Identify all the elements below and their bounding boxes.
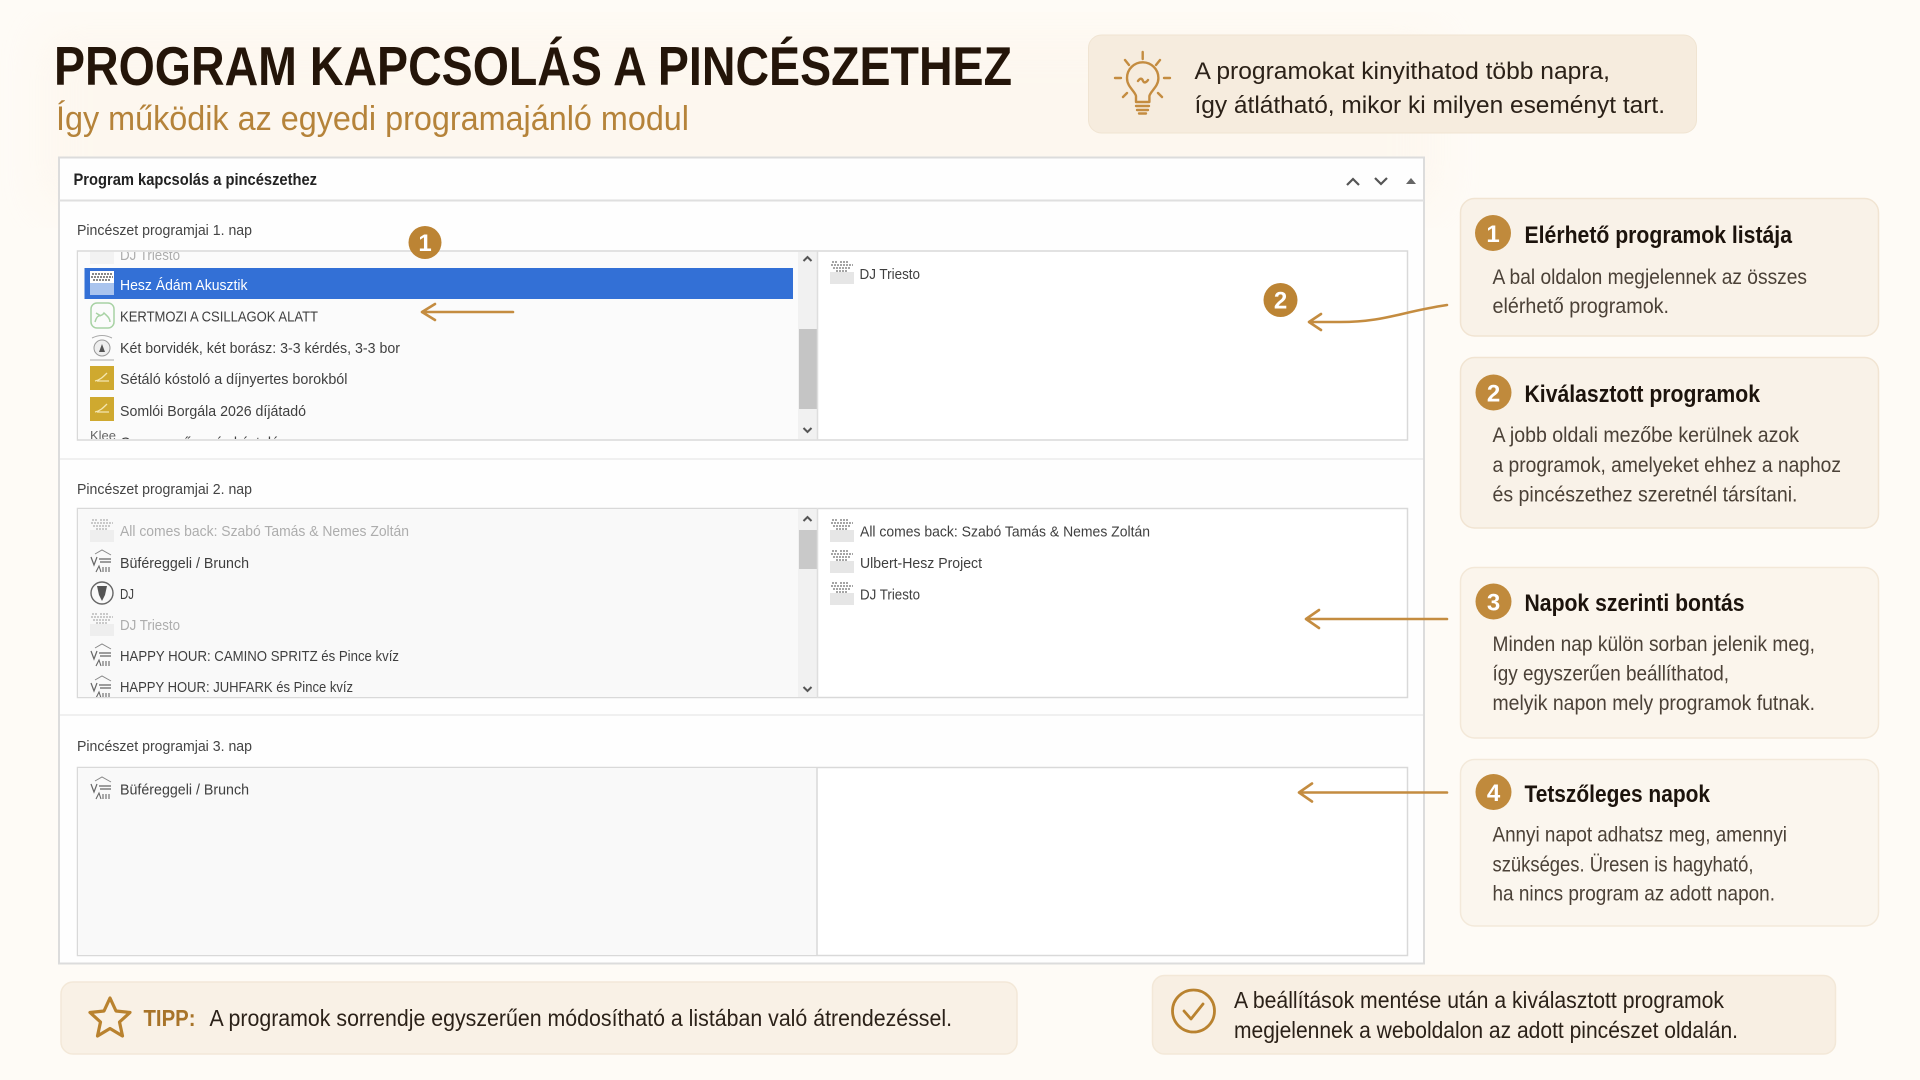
arrow to empty day <box>1299 784 1447 802</box>
title: PROGRAM KAPCSOLÁS A PINCÉSZETHEZ <box>54 35 1012 97</box>
day 3 label: Pincészet programjai 3. nap <box>77 738 252 755</box>
badge 1 on list <box>408 226 442 259</box>
day 1 available list: Sétáló kóstoló a díjnyertes borokból <box>120 371 348 388</box>
badge 2 on list <box>1264 283 1298 317</box>
card 4: arbitrary days: Tetszőleges napok <box>1524 781 1711 808</box>
card 4: arbitrary days: szükséges. Üresen is hagyható, <box>1492 854 1754 876</box>
icon: check circle <box>1172 990 1214 1032</box>
day 1 label: Pincészet programjai 1. nap <box>77 222 252 239</box>
day 2 available list <box>90 520 409 698</box>
day 2 available list: HAPPY HOUR: CAMINO SPRITZ és Pince kvíz <box>120 648 399 665</box>
callout: multiple days tip: A programokat kinyithatod több napra, <box>1194 58 1610 85</box>
day 1 available list: KERTMOZI A CSILLAGOK ALATT <box>120 308 318 326</box>
panel: program admin metabox <box>59 158 1424 964</box>
card 2: selected programs: a programok, amelyeket ehhez a naphoz <box>1492 454 1841 477</box>
card 2: selected programs <box>1460 358 1878 528</box>
day 2 selector <box>78 508 1408 698</box>
day 2 label: Pincészet programjai 2. nap <box>77 481 252 498</box>
arrow to selected list <box>1309 305 1447 330</box>
panel header: Program kapcsolás a pincészethez <box>74 170 317 189</box>
day 2 available list: DJ Triesto <box>120 617 180 634</box>
card 3: split by days: így egyszerűen beállíthatod, <box>1492 662 1729 686</box>
subtitle: Így működik az egyedi programajánló modul <box>56 100 689 138</box>
card 2: selected programs: 2 <box>1487 380 1500 408</box>
day 3 selector <box>78 767 1408 956</box>
callout: multiple days tip: így átlátható, mikor ki milyen eseményt tart. <box>1194 92 1665 119</box>
badge 1 on list: 1 <box>418 230 432 257</box>
card 3: split by days: melyik napon mely programok futnak. <box>1492 692 1815 715</box>
card 4: arbitrary days: ha nincs program az adott napon. <box>1492 882 1775 906</box>
day 1 selected list <box>830 262 920 284</box>
day 1 available list: Orgona műsor és kóstoló <box>120 434 279 452</box>
card 2: selected programs: Kiválasztott programok <box>1524 381 1761 408</box>
day 2 available list: DJ <box>120 586 134 603</box>
card 1: available programs: A bal oldalon megjelennek az összes <box>1492 266 1807 289</box>
card 2: selected programs: és pincészethez szeretnél társítani. <box>1492 484 1798 506</box>
day 2 available list: Büféreggeli / Brunch <box>120 555 249 572</box>
day 2 available list: HAPPY HOUR: JUHFARK és Pince kvíz <box>120 679 353 696</box>
day 1 scrollbar <box>798 251 818 440</box>
arrow to day rows <box>1306 610 1447 628</box>
save note box: A beállítások mentése után a kiválasztott programok <box>1234 987 1724 1013</box>
day 1 available list: DJ Triesto <box>120 247 180 264</box>
card 1: available programs: Elérhető programok listája <box>1524 222 1793 249</box>
card 3: split by days: Napok szerinti bontás <box>1524 590 1744 617</box>
tip box: A programok sorrendje egyszerűen módosítható a listában való átrendezéssel. <box>210 1005 952 1031</box>
tip box: TIPP: <box>144 1005 196 1031</box>
card 3: split by days <box>1460 568 1878 738</box>
day 2 selected list: All comes back: Szabó Tamás & Nemes Zoltán <box>860 524 1150 540</box>
badge 2 on list: 2 <box>1274 288 1287 314</box>
day 1 available list: Hesz Ádám Akusztik <box>120 277 248 294</box>
day 1 available list <box>84 252 793 439</box>
card 3: split by days: 3 <box>1487 590 1500 616</box>
tip box <box>61 982 1017 1054</box>
card 3: split by days: Minden nap külön sorban jelenik meg, <box>1492 633 1815 656</box>
card 1: available programs: elérhető programok. <box>1492 295 1669 318</box>
arrow to available list <box>422 304 513 320</box>
save note box: megjelennek a weboldalon az adott pincészet oldalán. <box>1234 1017 1738 1043</box>
save note box <box>1152 976 1836 1054</box>
icon: light bulb <box>1115 52 1170 114</box>
day 2 scrollbar <box>798 508 818 698</box>
card 4: arbitrary days: 4 <box>1487 780 1501 807</box>
day 2 selected list <box>830 520 1150 605</box>
day 2 available list: All comes back: Szabó Tamás & Nemes Zoltán <box>120 523 409 540</box>
day 1 selector <box>78 242 1408 452</box>
day 1 available list: Somlói Borgála 2026 díjátadó <box>120 403 306 420</box>
card 1: available programs: 1 <box>1486 221 1500 248</box>
day 1 selected list: DJ Triesto <box>860 266 920 283</box>
card 4: arbitrary days <box>1460 760 1878 926</box>
card 4: arbitrary days: Annyi napot adhatsz meg, amennyi <box>1492 824 1787 846</box>
day 1 available list: Klee <box>90 428 116 443</box>
icon: star <box>90 998 130 1036</box>
card 1: available programs <box>1460 198 1878 336</box>
callout: multiple days tip <box>1088 35 1696 133</box>
day 3 selector: Büféreggeli / Brunch <box>120 782 249 798</box>
day 2 selected list: DJ Triesto <box>860 586 920 604</box>
day 1 available list: Két borvidék, két borász: 3-3 kérdés, 3-3 bor <box>120 340 400 357</box>
card 2: selected programs: A jobb oldali mezőbe kerülnek azok <box>1492 424 1799 447</box>
panel header <box>59 170 1424 200</box>
day 2 selected list: Ulbert-Hesz Project <box>860 555 983 572</box>
